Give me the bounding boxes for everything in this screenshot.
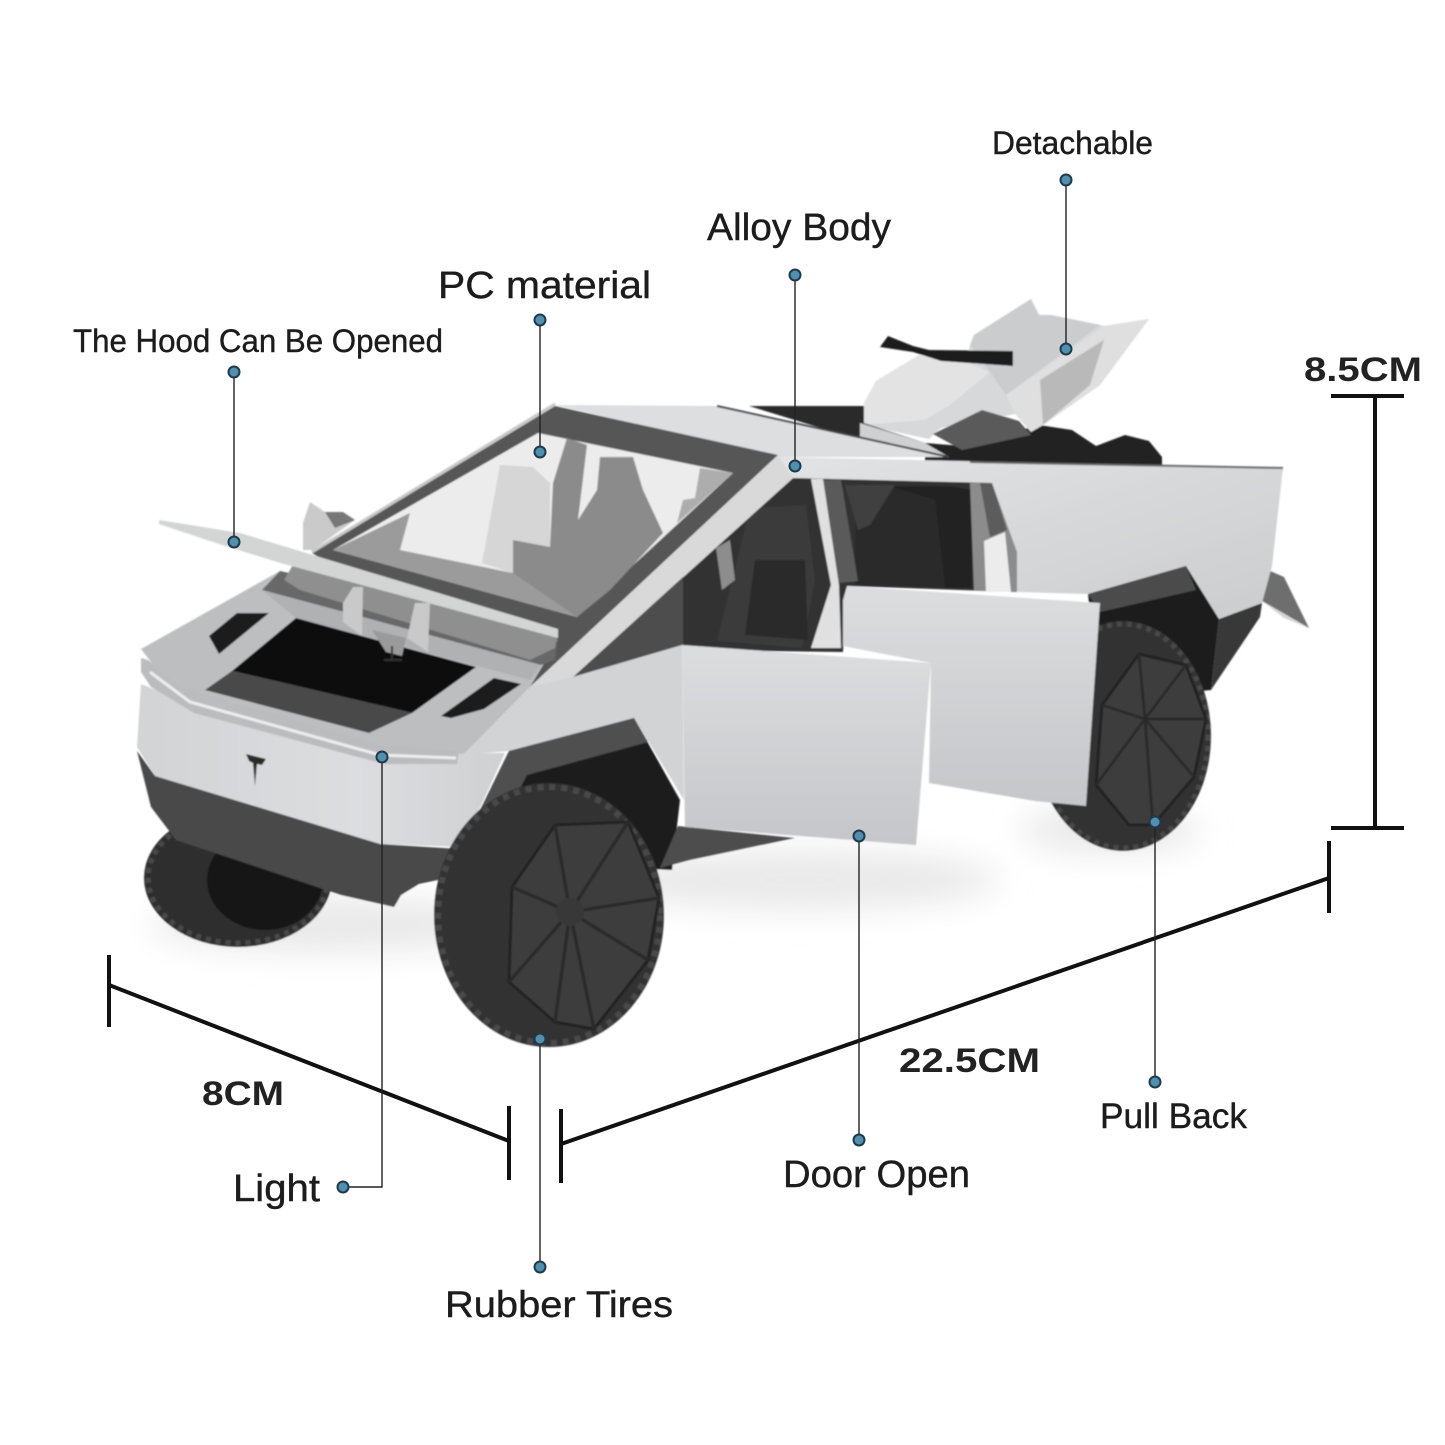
label: PC material: PC material — [438, 265, 651, 307]
front right tire — [434, 783, 664, 1047]
windshield frame — [312, 406, 778, 687]
label: Door Open: Door Open — [783, 1154, 970, 1196]
detachable ramp and quad bike — [864, 299, 1149, 450]
label: Rubber Tires — [445, 1034, 673, 1325]
front silver panel — [137, 684, 505, 847]
label: Detachable: Detachable — [992, 125, 1153, 161]
label: Pull Back — [1100, 816, 1247, 1136]
windshield glass — [333, 433, 733, 617]
label: Alloy Body — [707, 207, 891, 472]
hidden tire in bed — [925, 425, 1162, 465]
truck illustration — [137, 299, 1309, 1047]
front right door — [682, 645, 931, 845]
hood struts — [343, 587, 430, 660]
back band behind hood — [262, 571, 558, 665]
hood vents — [209, 613, 521, 718]
label: Light: Light — [233, 1168, 320, 1210]
dimension: 8.5CM height: 8.5CM — [1304, 351, 1422, 389]
front bumper — [137, 751, 487, 907]
label: The Hood Can Be Opened: The Hood Can Be Opened — [73, 323, 443, 359]
dimension: 8CM width: 8CM — [202, 1075, 284, 1113]
left mirror — [303, 502, 355, 550]
label: Pull Back: Pull Back — [1100, 1097, 1247, 1136]
label: Rubber Tires: Rubber Tires — [445, 1284, 673, 1325]
far front tire — [144, 809, 332, 947]
front wheel arch — [462, 718, 680, 870]
b pillar — [811, 479, 858, 648]
body side — [778, 457, 1283, 619]
a pillar — [530, 455, 793, 695]
trunk trim — [262, 590, 541, 680]
rear seats — [845, 485, 972, 588]
rear wheel arch — [1088, 566, 1219, 700]
front right fender — [463, 645, 684, 800]
light bar — [141, 658, 459, 764]
label: The Hood Can Be Opened — [73, 323, 443, 548]
front seat — [716, 505, 815, 648]
dimension: 22.5CM length: 22.5CM — [899, 1042, 1040, 1080]
front logo — [246, 754, 266, 786]
dimension: 8CM width — [109, 955, 509, 1180]
label: Detachable — [992, 125, 1153, 354]
rear underbody — [1211, 603, 1262, 690]
rear fin — [1262, 570, 1309, 628]
dimension: 8.5CM height — [1304, 351, 1422, 828]
label: PC material — [438, 265, 651, 458]
interior — [683, 478, 1017, 652]
door sill — [660, 826, 795, 868]
hood panel — [159, 520, 558, 660]
truck bed opening — [749, 406, 950, 457]
rear right door — [843, 586, 1100, 806]
rear tire — [1035, 621, 1211, 851]
hood deck — [141, 571, 558, 755]
label: Alloy Body: Alloy Body — [707, 207, 891, 249]
roof rim — [312, 404, 555, 552]
trunk opening — [205, 618, 476, 733]
roof — [555, 405, 949, 457]
ground shadow — [150, 806, 1200, 953]
label: Door Open — [783, 830, 970, 1196]
dimension: 22.5CM length — [561, 841, 1329, 1183]
label: Light — [233, 752, 388, 1210]
dark triangle — [573, 577, 683, 677]
c pillar — [970, 483, 1017, 592]
